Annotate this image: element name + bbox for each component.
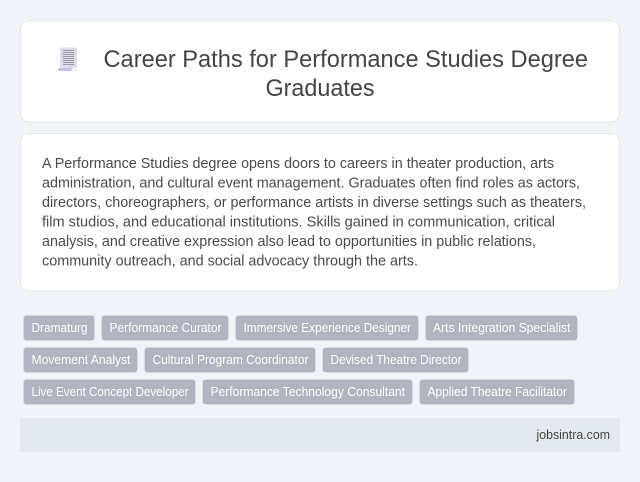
tag: Arts Integration Specialist — [426, 316, 578, 340]
tag: Immersive Experience Designer — [236, 316, 418, 340]
tag: Live Event Concept Developer: Live Event Concept Developer — [32, 385, 188, 399]
text block: description: directors, choreographers, or performance artists in diverse settings such as theaters, — [42, 194, 586, 211]
tag: Arts Integration Specialist: Arts Integration Specialist — [433, 321, 571, 335]
tag: Performance Curator: Performance Curator — [110, 321, 222, 335]
tag: Devised Theatre Director — [322, 348, 468, 372]
tag: Dramaturg — [24, 316, 94, 340]
title: Career Paths for Performance Studies Degree — [104, 46, 588, 73]
tag: Performance Technology Consultant: Performance Technology Consultant — [210, 385, 406, 399]
tag: Immersive Experience Designer: Immersive Experience Designer — [244, 321, 411, 335]
icon: paper scroll — [58, 48, 77, 71]
text block: description: administration, and cultural event management. Graduates often find roles as actors, — [42, 174, 580, 192]
text block: description: analysis, and creative expression also lead to opportunities in public relations, — [42, 233, 536, 250]
tag: Applied Theatre Facilitator — [420, 380, 574, 404]
text block: description: film studios, and educational institutions. Skills gained in communication, critical — [42, 214, 555, 230]
panel: header — [20, 20, 620, 122]
title — [104, 46, 588, 102]
title: Graduates — [266, 75, 374, 102]
panel: description — [20, 134, 620, 291]
text block: description: A Performance Studies degree opens doors to careers in theater production, arts — [42, 155, 554, 172]
tag: Performance Curator — [102, 316, 228, 340]
tag: Applied Theatre Facilitator: Applied Theatre Facilitator — [428, 385, 567, 399]
tag: Movement Analyst: Movement Analyst — [32, 353, 131, 367]
footer source text: jobsintra.com — [536, 428, 610, 442]
tag: Devised Theatre Director: Devised Theatre Director — [330, 353, 462, 367]
tag: Movement Analyst — [24, 348, 138, 372]
tag: Cultural Program Coordinator: Cultural Program Coordinator — [152, 353, 308, 367]
tag: Cultural Program Coordinator — [144, 348, 316, 372]
footer — [20, 418, 620, 452]
text block: description — [42, 155, 586, 270]
tag: Dramaturg: Dramaturg — [32, 321, 88, 335]
tag: Live Event Concept Developer — [24, 380, 196, 404]
tag list — [24, 316, 578, 404]
tag: Performance Technology Consultant — [202, 380, 412, 404]
text block: description: community outreach, and social advocacy through the arts. — [42, 252, 418, 270]
